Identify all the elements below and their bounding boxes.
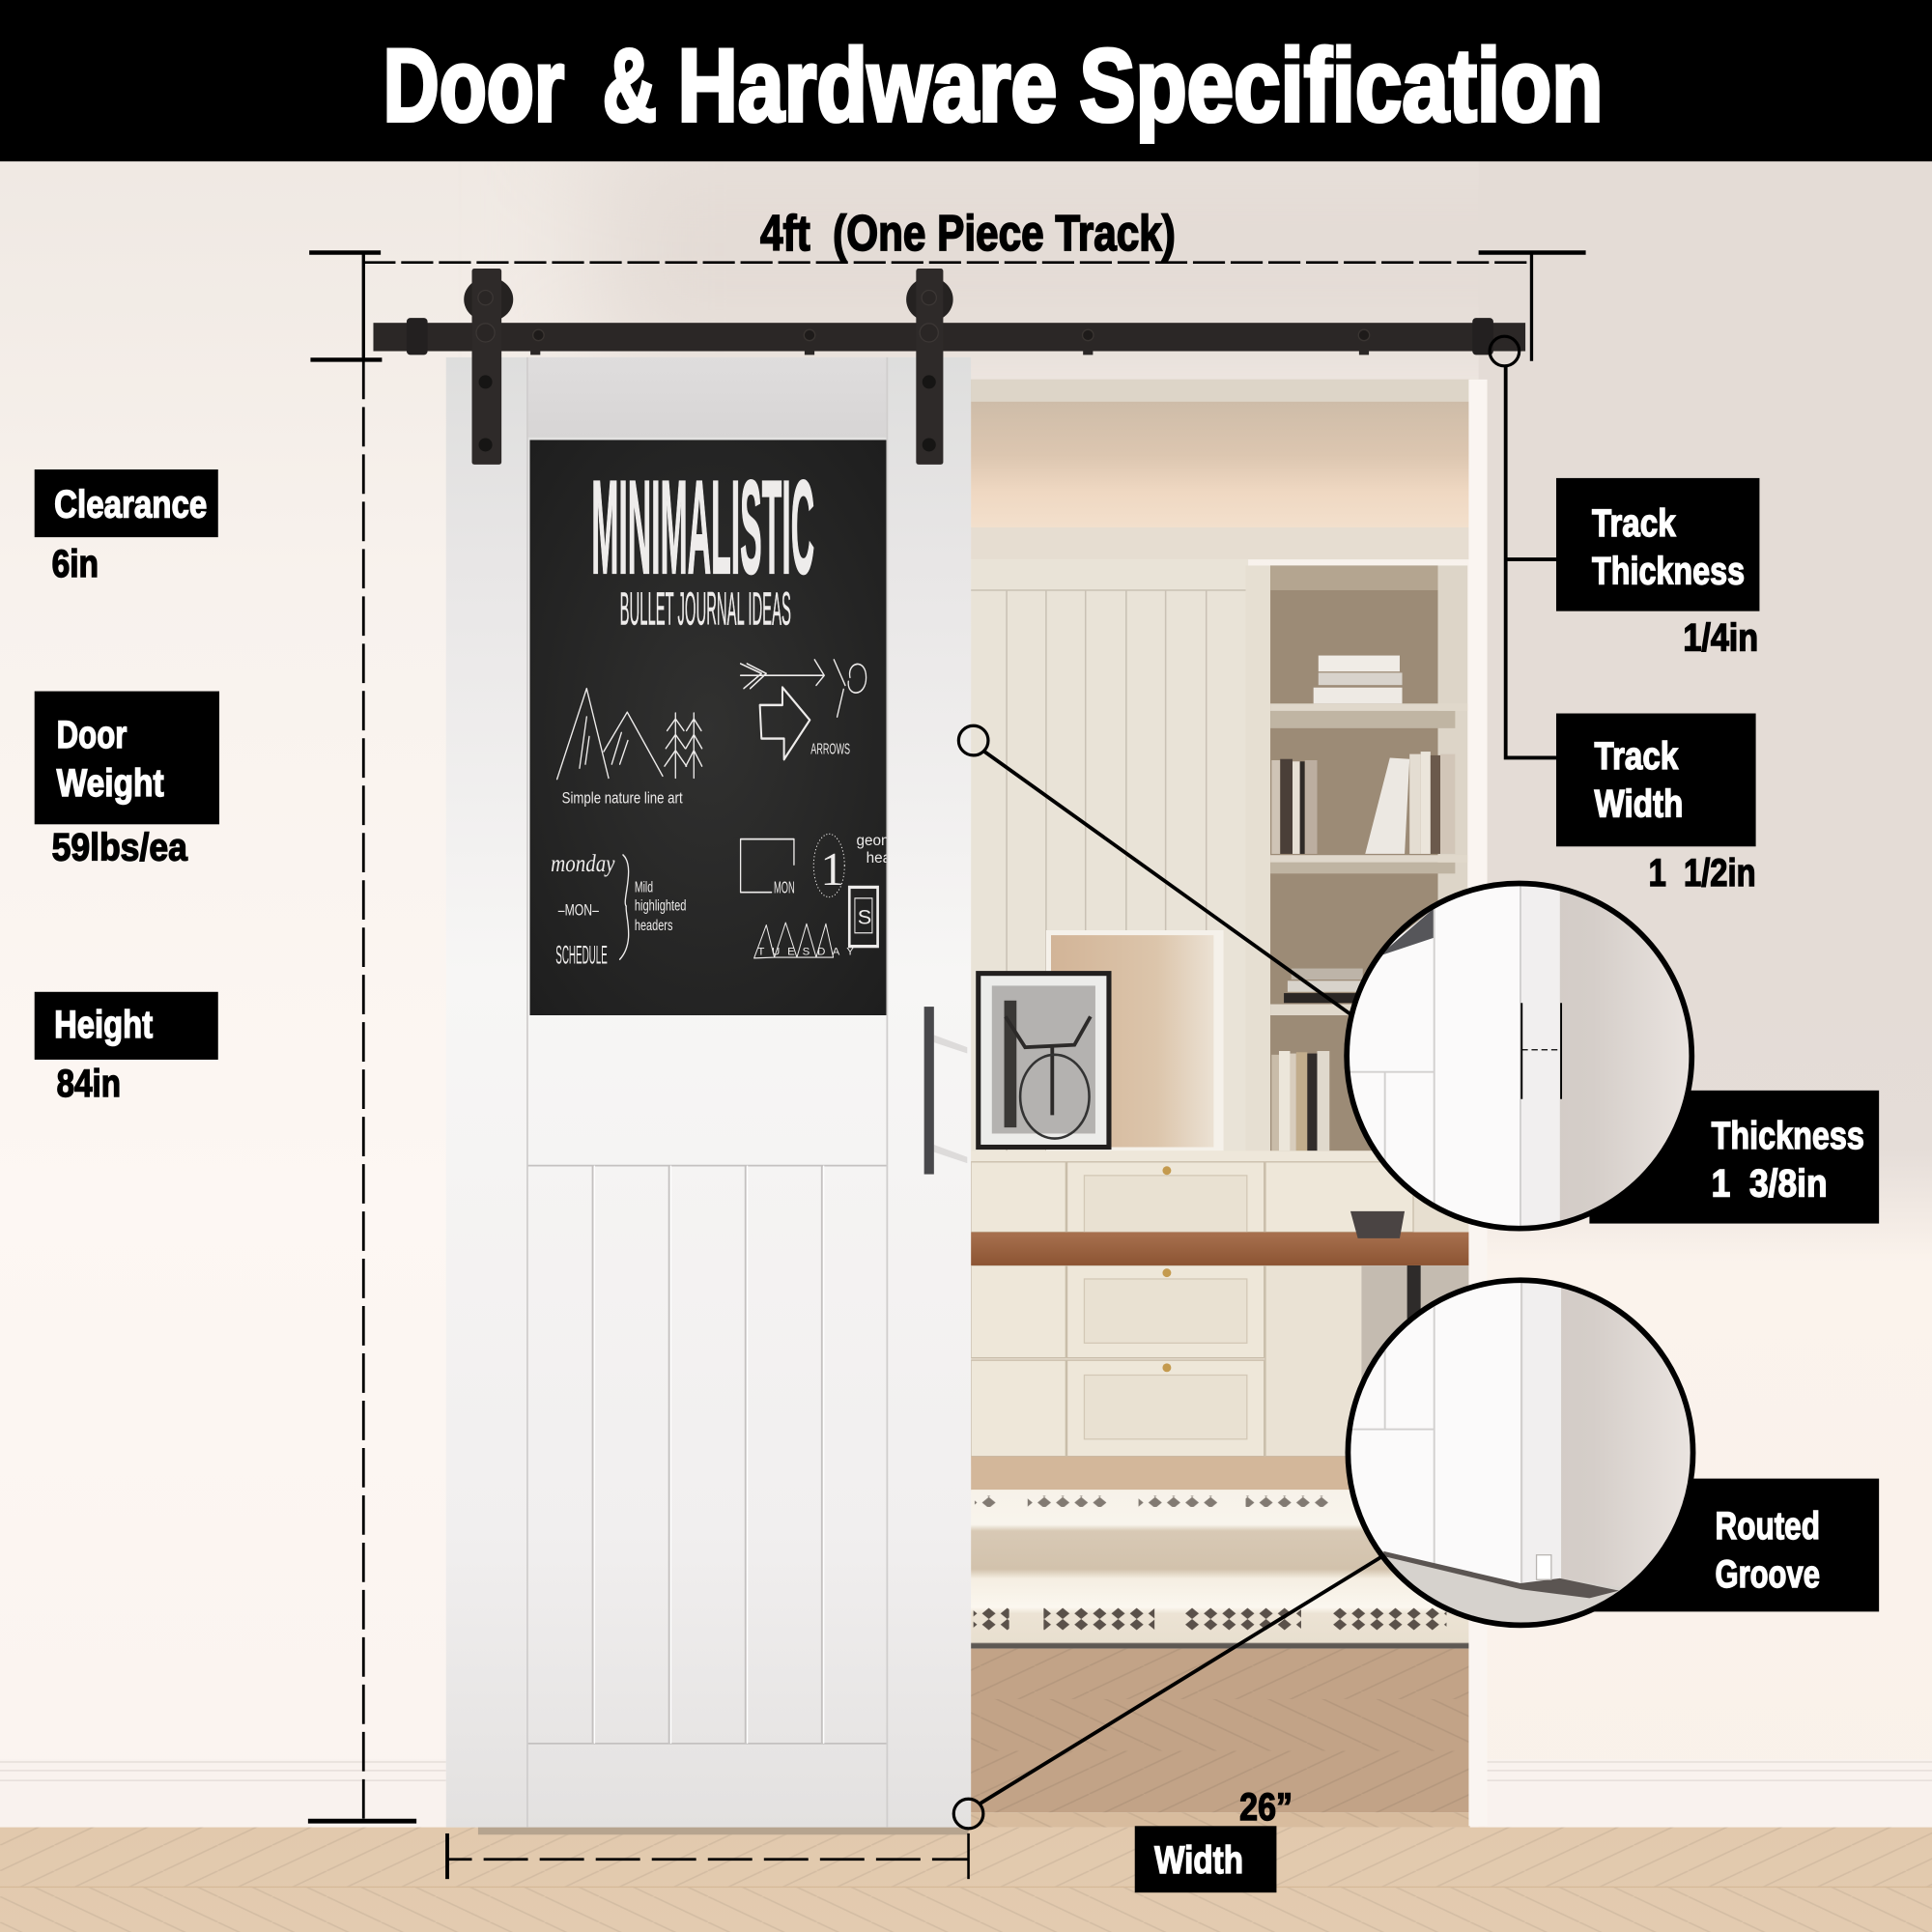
callout: door weight [35, 692, 219, 868]
cabinets [971, 1151, 1470, 1466]
left hanger strap [464, 269, 513, 465]
callout: track width: 1 1/2in [1649, 852, 1756, 895]
ceiling [971, 380, 1470, 529]
framed bicycle photo [976, 971, 1112, 1150]
chalk captions: Simple nature line art [562, 789, 683, 808]
panelled back wall [971, 559, 1248, 1153]
pointer to routed groove detail [953, 1556, 1382, 1829]
callout: track thickness: Track [1592, 502, 1677, 545]
callout: routed groove: Routed [1716, 1505, 1820, 1548]
door slab [446, 357, 971, 1828]
callout: clearance: Clearance [54, 484, 207, 526]
track length dimension [309, 252, 1586, 361]
chalk captions: headers [635, 918, 673, 934]
title: Specification [1079, 27, 1603, 143]
planks joints and rails [527, 1166, 887, 1744]
callout: door width: 26” [1239, 1786, 1293, 1829]
callout: thickness: 1 3/8in [1712, 1163, 1828, 1206]
chalk captions: S [858, 905, 871, 929]
thickness marker [1521, 1003, 1561, 1099]
chalk captions: ARROWS [810, 742, 850, 758]
header band [0, 0, 1932, 161]
callout: thickness: Thickness [1712, 1115, 1864, 1157]
callout: track thickness: 1/4in [1683, 616, 1758, 659]
sliding barn door [446, 357, 971, 1828]
doorway side casing [1468, 380, 1488, 1826]
callout: door width [1135, 1786, 1293, 1892]
chalkboard [529, 440, 901, 1015]
chalk captions: Mild [635, 879, 653, 895]
chalk captions: SCHEDULE [555, 940, 608, 969]
chalk captions: highlighted [635, 898, 686, 915]
chalk captions: head [867, 850, 899, 867]
stile joints [527, 357, 887, 1828]
doorway head casing [971, 380, 1479, 402]
title [384, 27, 1603, 143]
track leader lines [1490, 336, 1556, 757]
pointer to door thickness detail [958, 725, 1355, 1018]
callout: track width: Track [1595, 735, 1679, 778]
callout: track width: Width [1595, 783, 1683, 826]
right hanger strap [906, 269, 953, 465]
callout: routed groove: Groove [1716, 1553, 1820, 1596]
desk cup [1350, 1211, 1405, 1238]
room interior seen through doorway [971, 380, 1488, 1828]
door width dimension line [447, 1833, 969, 1879]
callout: door weight: 59lbs/ea [52, 826, 188, 868]
callout: height: Height [54, 1004, 153, 1046]
callout: height [35, 992, 218, 1105]
top rail [527, 357, 887, 438]
chalkboard: BULLET JOURNAL IDEAS [620, 583, 791, 636]
callout: height: 84in [57, 1063, 121, 1105]
crown moulding [971, 527, 1470, 559]
callout: track width [1556, 714, 1756, 895]
callout: door weight: Weight [57, 762, 164, 805]
callout: routed groove [1589, 1479, 1879, 1611]
chalk captions [551, 742, 901, 969]
callout: track thickness: Thickness [1592, 551, 1745, 593]
inner floor and rug [971, 1457, 1470, 1828]
chalk captions: geome [856, 833, 901, 849]
text: MINIMALISTIC [591, 453, 814, 602]
callout: door weight: Door [57, 714, 127, 756]
height dimension line [308, 359, 416, 1821]
title: & [603, 27, 657, 143]
chalk captions: –MON– [558, 901, 599, 920]
wooden floor [0, 1828, 1932, 1932]
chalk doodles [557, 660, 878, 959]
title: Door [384, 27, 564, 143]
magnifier: door thickness [1343, 881, 1700, 1235]
bookshelf [1246, 565, 1467, 1152]
callout: door width: Width [1154, 1839, 1243, 1882]
chalk captions: MON [774, 878, 795, 897]
chalk captions: 1 [820, 844, 844, 895]
callout: thickness [1589, 1091, 1879, 1224]
title: Hardware [678, 27, 1057, 143]
door handle [924, 1007, 967, 1175]
framed canvas art [1046, 930, 1224, 1152]
baseboard [0, 1759, 1932, 1829]
wooden desk [971, 1233, 1470, 1265]
magnifier: routed groove [1343, 1278, 1700, 1633]
track rail [373, 318, 1525, 355]
callout: clearance [35, 469, 218, 585]
track length label: 4ft (One Piece Track) [760, 206, 1176, 262]
chalk captions: T U E S D A Y [757, 947, 854, 958]
books [1271, 656, 1455, 1151]
chalk captions: monday [551, 849, 615, 877]
callout: track thickness [1556, 478, 1759, 659]
barn door track hardware [373, 269, 1525, 465]
callout: clearance: 6in [52, 543, 99, 585]
